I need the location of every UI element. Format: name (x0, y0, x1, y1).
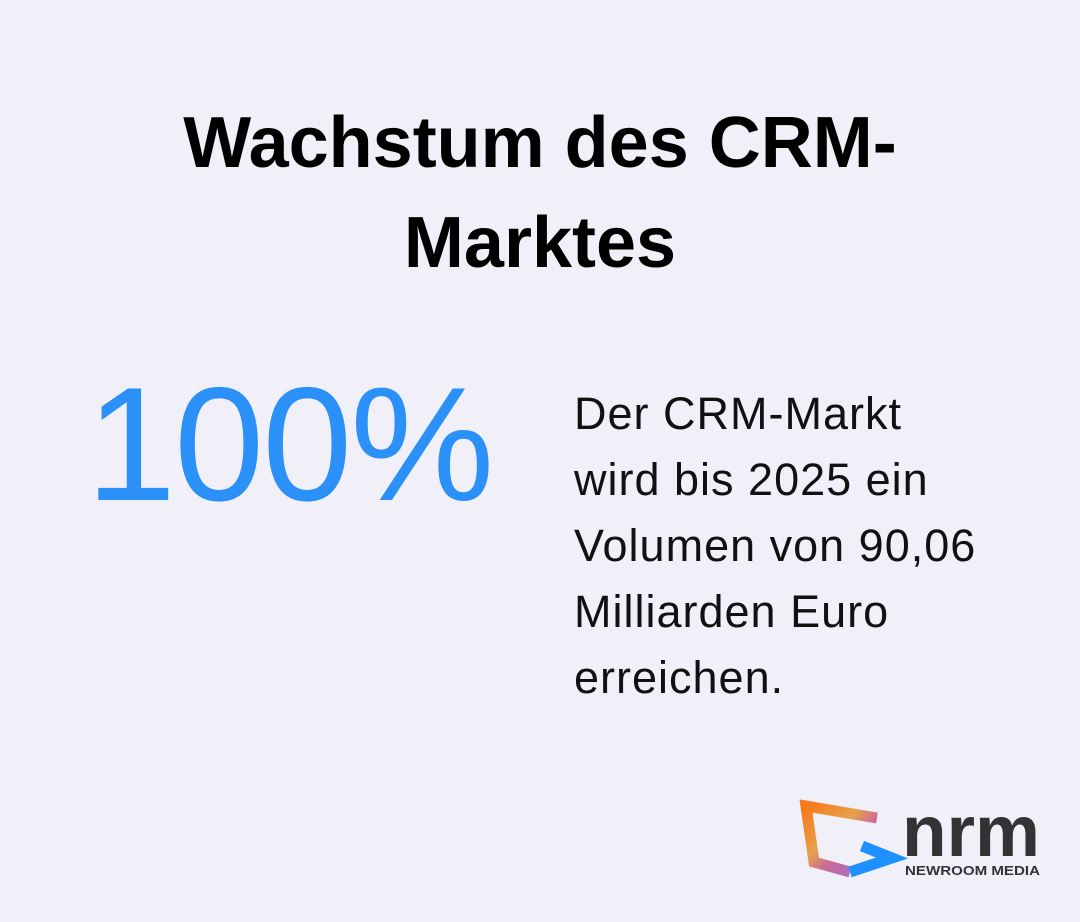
description text: Milliarden Euro (574, 586, 889, 637)
description text (574, 388, 976, 703)
logo (800, 795, 1041, 878)
description text: erreichen. (574, 652, 784, 703)
description text: wird bis 2025 ein (574, 454, 929, 505)
description text: Der CRM-Markt (574, 388, 902, 439)
logo: NEWROOM MEDIA (905, 863, 1041, 878)
title: Wachstum des CRM- (183, 103, 897, 183)
title (183, 103, 897, 283)
title: Marktes (404, 203, 676, 283)
description text: Volumen von 90,06 (574, 520, 976, 571)
big stat: 100% (86, 354, 492, 535)
